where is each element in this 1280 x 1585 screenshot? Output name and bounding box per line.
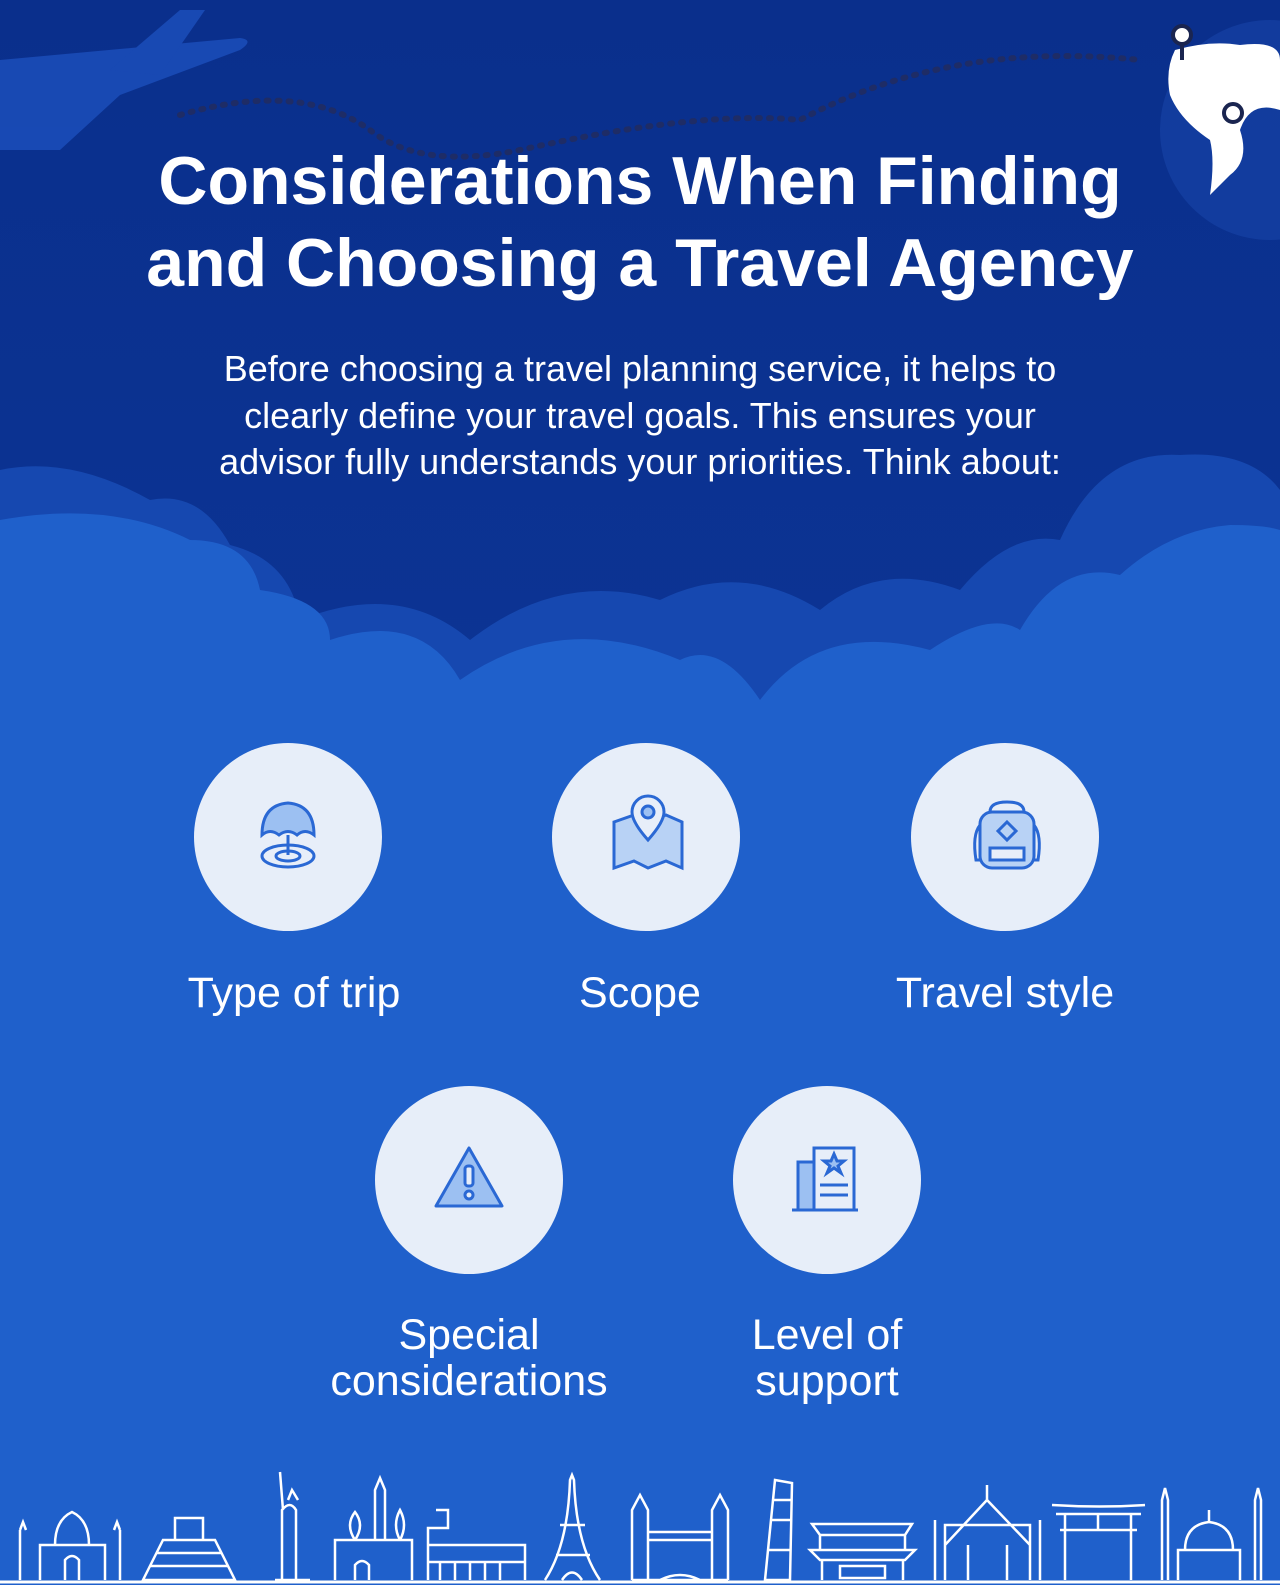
item: special considerations: Special — [398, 1311, 540, 1359]
icon: map pin — [614, 796, 682, 868]
item: type of trip: Type of trip — [188, 969, 400, 1017]
icon: warning — [436, 1148, 502, 1206]
flight path dotted — [180, 56, 1140, 157]
intro paragraph: Before choosing a travel planning service, it helps to — [224, 348, 1056, 389]
intro paragraph: advisor fully understands your priorities. Think about: — [219, 441, 1061, 482]
item: special considerations — [330, 1086, 608, 1405]
icon: hotel — [792, 1148, 858, 1210]
skyline of landmarks — [0, 1472, 1280, 1582]
item: travel style — [896, 743, 1114, 1017]
intro paragraph: clearly define your travel goals. This ensures your — [244, 395, 1036, 436]
back cloud layer — [0, 454, 1280, 1585]
title: Considerations When Finding — [158, 143, 1122, 219]
icon: globe with pins — [1160, 20, 1280, 240]
item: scope: Scope — [579, 969, 701, 1017]
item: level of support — [733, 1086, 921, 1405]
item: type of trip — [188, 743, 400, 1017]
item: level of support: support — [755, 1357, 899, 1405]
item: level of support: Level of — [752, 1311, 903, 1359]
item: travel style: Travel style — [896, 969, 1114, 1017]
front cloud layer — [0, 513, 1280, 1585]
icon: umbrella — [262, 803, 314, 867]
title: and Choosing a Travel Agency — [146, 225, 1134, 301]
icon: backpack — [975, 802, 1039, 868]
title — [146, 143, 1134, 301]
icon: airplane — [0, 10, 248, 150]
item: special considerations: considerations — [330, 1357, 608, 1405]
item: scope — [552, 743, 740, 1017]
intro paragraph — [219, 348, 1061, 482]
